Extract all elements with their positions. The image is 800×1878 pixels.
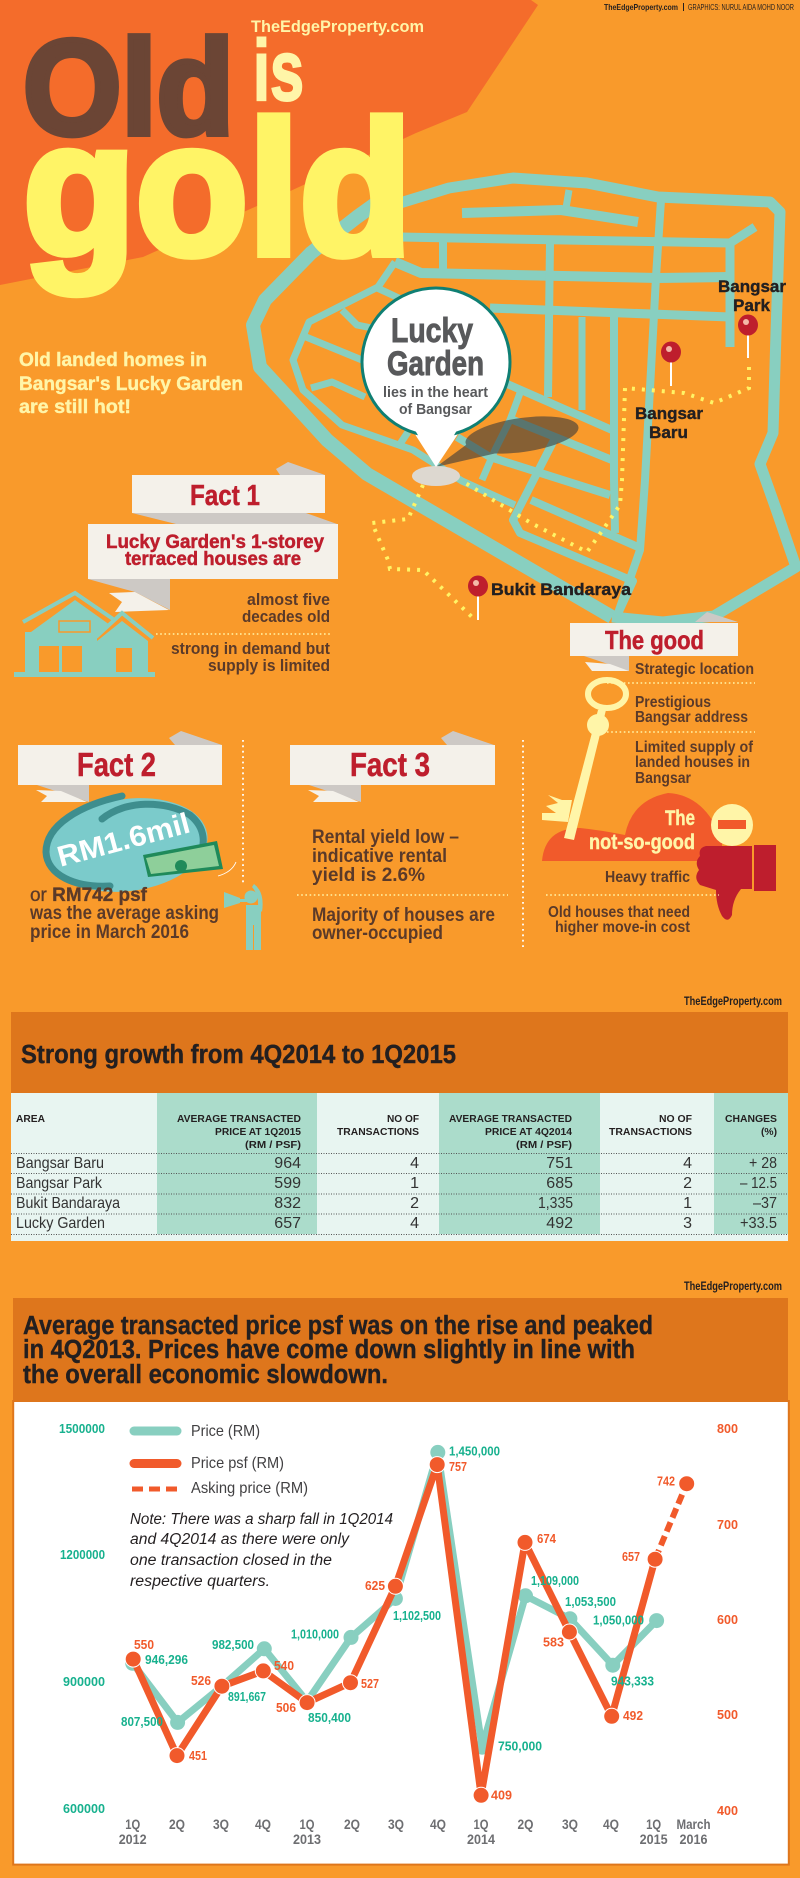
RM1.6mil price blob	[42, 788, 214, 902]
Fact 1 details: strong in demand but	[171, 640, 330, 658]
price psf line	[125, 1457, 695, 1803]
dotted route: Bukit Bandaraya to Lucky Garden	[372, 485, 472, 617]
title: is	[253, 23, 304, 119]
x axis labels: 1Q	[300, 1817, 314, 1832]
icon: houses	[14, 593, 155, 677]
Fact 2 text: was the average asking	[29, 902, 219, 924]
The not-so-good list: Old houses that need	[548, 904, 690, 921]
ribbon: Lucky Garden's 1-storey terraced houses: terraced houses are	[125, 548, 301, 570]
panel: chart heading: in 4Q2013. Prices have come down slightly in line with	[23, 1336, 635, 1364]
dotted route: Bangsar Park to Lucky Garden	[462, 367, 749, 552]
table header row: AVERAGE TRANSACTED	[177, 1113, 301, 1125]
price data labels: 750,000	[498, 1740, 542, 1754]
x axis labels: 4Q	[255, 1817, 271, 1832]
intro text: Old landed homes in	[19, 350, 207, 371]
chart legend: Asking price (RM)	[191, 1480, 308, 1497]
note: Note: There was a sharp fall in 1Q2014	[130, 1511, 393, 1528]
table row: Bangsar Baru: Bangsar Baru	[16, 1155, 104, 1172]
price psf data labels: 506	[276, 1701, 296, 1715]
note: one transaction closed in the	[130, 1552, 332, 1569]
pin: Bangsar Park	[738, 314, 758, 358]
x axis labels	[119, 1817, 710, 1847]
intro text: Bangsar's Lucky Garden	[19, 374, 243, 395]
table row: Bangsar Baru	[16, 1155, 777, 1172]
x axis labels: 2Q	[518, 1817, 534, 1832]
x axis labels: 2Q	[344, 1817, 360, 1832]
RM1.6mil price blob: RM1.6mil	[54, 808, 194, 874]
cloud: The not-so-good: not-so-good	[589, 831, 695, 854]
Fact 1 details: decades old	[242, 608, 330, 626]
The not-so-good list: Heavy traffic	[605, 869, 690, 886]
price psf data labels: 492	[623, 1709, 643, 1723]
price data labels	[121, 1444, 654, 1754]
The good list: Bangsar address	[635, 709, 748, 726]
panel: line chart	[13, 1401, 789, 1865]
table row: Bukit Bandaraya: 1,335	[538, 1195, 573, 1212]
price data labels: 946,296	[145, 1653, 188, 1667]
x axis labels: 3Q	[213, 1817, 229, 1832]
price psf data labels: 757	[449, 1460, 467, 1474]
callout: Lucky Garden: Garden	[387, 345, 484, 383]
x axis labels: 2Q	[169, 1817, 185, 1832]
Fact 2 text: or RM742 psf	[30, 884, 147, 906]
callout: Lucky Garden: Lucky	[391, 312, 473, 350]
x axis labels: March	[676, 1817, 710, 1832]
ribbon: The good	[570, 612, 738, 671]
Fact 3 text: indicative rental	[312, 845, 447, 867]
right axis labels	[717, 1422, 738, 1818]
table row: Lucky Garden: 3	[683, 1215, 692, 1232]
table row: Bukit Bandaraya: 832	[274, 1195, 301, 1212]
table header row: AREA	[16, 1113, 45, 1125]
icon: man with megaphone	[218, 862, 263, 950]
panel: chart heading: Average transacted price psf was on the rise and peaked	[23, 1312, 653, 1340]
left axis labels: 600000	[63, 1802, 105, 1816]
price psf data labels: 409	[491, 1788, 512, 1802]
table row: Bangsar Baru: 964	[274, 1155, 301, 1172]
right axis labels: 800	[717, 1422, 738, 1436]
credit line	[604, 2, 794, 12]
price psf data labels: 583	[543, 1636, 564, 1650]
ribbon: The good: The good	[605, 625, 704, 655]
panel: chart heading: the overall economic slowdown.	[23, 1361, 388, 1389]
x axis labels: 3Q	[388, 1817, 404, 1832]
callout: Lucky Garden: lies in the heart	[383, 385, 488, 401]
The not-so-good list: higher move-in cost	[555, 919, 690, 936]
table header row: TRANSACTIONS	[609, 1126, 692, 1138]
icon: key	[542, 680, 626, 840]
map of Bangsar roads	[253, 178, 796, 622]
pin: Bangsar Baru	[661, 342, 681, 386]
The not-so-good list	[546, 869, 719, 936]
note: and 4Q2014 as there were only	[130, 1531, 350, 1548]
chart legend: Price (RM)	[191, 1423, 260, 1440]
table row: Bukit Bandaraya	[16, 1195, 777, 1212]
price data labels: 891,667	[228, 1690, 266, 1704]
table header row: (RM / PSF)	[245, 1139, 301, 1151]
right axis labels: 400	[717, 1804, 738, 1818]
table row: Lucky Garden: 657	[274, 1215, 301, 1232]
x axis labels: 2014	[467, 1832, 495, 1847]
Fact 3 text	[297, 826, 508, 944]
table header row: (RM / PSF)	[516, 1139, 572, 1151]
x axis labels: 4Q	[430, 1817, 446, 1832]
panel: growth table heading: Strong growth from 4Q2014 to 1Q2015	[21, 1041, 456, 1069]
Fact 1 details: supply is limited	[208, 657, 330, 675]
Fact 1 details	[156, 591, 332, 675]
price data labels: 1,109,000	[531, 1574, 579, 1588]
price line	[125, 1445, 664, 1755]
title: Old	[23, 12, 234, 163]
x axis labels: 1Q	[646, 1817, 661, 1832]
table row: Bangsar Baru: 4	[683, 1155, 692, 1172]
x axis labels: 4Q	[603, 1817, 619, 1832]
table row: Bangsar Baru: 751	[546, 1155, 573, 1172]
The good list: Limited supply of	[635, 739, 754, 756]
ribbon: Fact 1	[132, 462, 337, 524]
note	[130, 1511, 393, 1590]
Fact 2 text: price in March 2016	[30, 921, 189, 943]
x axis labels: 3Q	[562, 1817, 578, 1832]
table row: Bangsar Park	[16, 1175, 777, 1192]
map label: Bangsar Baru: Bangsar	[635, 404, 703, 423]
table row: Lucky Garden: 492	[546, 1215, 573, 1232]
left axis labels: 900000	[63, 1675, 105, 1689]
chart legend	[132, 1423, 308, 1497]
price data labels: 1,010,000	[291, 1628, 339, 1642]
table row: Bangsar Park: Bangsar Park	[16, 1175, 103, 1192]
left axis labels: 1500000	[59, 1422, 105, 1436]
right axis labels: 600	[717, 1613, 738, 1627]
map label: Bangsar Baru: Baru	[649, 423, 688, 442]
icon: banknote	[143, 841, 223, 877]
table row: Bangsar Park: – 12.5	[740, 1175, 777, 1192]
map label: Bukit Bandaraya: Bukit Bandaraya	[491, 580, 632, 599]
panel: chart heading	[13, 1298, 788, 1401]
table row: Lucky Garden: 4	[410, 1215, 419, 1232]
The good list	[607, 661, 755, 787]
table row: Bangsar Park: 685	[546, 1175, 573, 1192]
price psf data labels: 742	[657, 1475, 675, 1489]
x axis labels: 1Q	[125, 1817, 140, 1832]
price psf data labels: 674	[537, 1532, 556, 1546]
table header row: AVERAGE TRANSACTED	[449, 1113, 572, 1125]
table row: Bukit Bandaraya: 1	[683, 1195, 692, 1212]
intro text	[19, 350, 243, 418]
table header row: PRICE AT 4Q2014	[485, 1126, 572, 1138]
chart legend: Price psf (RM)	[191, 1455, 284, 1472]
cloud: The not-so-good: The	[665, 807, 695, 830]
The good list: Strategic location	[635, 661, 754, 678]
map label: Bangsar Park	[718, 277, 786, 315]
table header row: CHANGES	[725, 1113, 777, 1125]
ribbon: Fact 2: Fact 2	[77, 746, 156, 783]
panel: growth table heading	[11, 1012, 788, 1093]
price data labels: 850,400	[308, 1711, 351, 1725]
ribbon: Fact 3	[290, 731, 495, 802]
x axis labels: 1Q	[474, 1817, 488, 1832]
credit line: TheEdgeProperty.com	[604, 2, 678, 12]
table row: Bangsar Park: 1	[410, 1175, 419, 1192]
right axis labels: 500	[717, 1708, 738, 1722]
price psf data labels: 540	[274, 1659, 294, 1673]
Fact 3 text: Majority of houses are	[312, 904, 495, 926]
table row: Bukit Bandaraya: Bukit Bandaraya	[16, 1195, 120, 1212]
note: respective quarters.	[130, 1573, 270, 1590]
Fact 3 text: yield is 2.6%	[312, 864, 425, 886]
price psf data labels: 550	[134, 1638, 154, 1652]
The good list: landed houses in	[635, 754, 750, 771]
icon: minus sign	[711, 804, 753, 846]
price psf data labels	[134, 1460, 675, 1802]
table row: Lucky Garden	[16, 1215, 777, 1232]
x axis labels: 2016	[680, 1832, 708, 1847]
Fact 1 details: almost five	[247, 591, 330, 609]
icon: thumbs down	[696, 845, 776, 920]
site name: TheEdgeProperty.com	[251, 17, 424, 36]
dark orange title banner	[0, 0, 538, 285]
table row: Bangsar Baru: 4	[410, 1155, 419, 1172]
table row: Lucky Garden: +33.5	[740, 1215, 777, 1232]
price psf data labels: 625	[365, 1579, 385, 1593]
The good list: Bangsar	[635, 770, 691, 787]
cloud: The not-so-good	[542, 793, 722, 861]
map label: Bangsar Baru	[635, 404, 703, 442]
table row: Bukit Bandaraya: –37	[753, 1195, 777, 1212]
left axis labels	[59, 1422, 105, 1816]
table header row: TRANSACTIONS	[337, 1126, 419, 1138]
intro text: are still hot!	[19, 397, 131, 418]
table header row: NO OF	[387, 1113, 420, 1125]
price psf data labels: 657	[622, 1550, 640, 1564]
ribbon: Fact 3: Fact 3	[350, 746, 430, 783]
table header row: NO OF	[659, 1113, 693, 1125]
callout: Lucky Garden: of Bangsar	[399, 402, 472, 418]
location shadow	[436, 410, 581, 467]
price data labels: 1,050,000	[593, 1613, 644, 1627]
table row: Bukit Bandaraya: 2	[410, 1195, 419, 1212]
ribbon: Fact 2	[18, 731, 222, 802]
price data labels: 1,450,000	[449, 1444, 500, 1458]
table header row	[16, 1113, 777, 1151]
right axis labels: 700	[717, 1518, 738, 1532]
panel: growth table	[11, 1093, 788, 1241]
price data labels: 1,102,500	[393, 1609, 441, 1623]
table row: Bangsar Park: 2	[683, 1175, 692, 1192]
x axis labels: 2015	[640, 1832, 668, 1847]
price data labels: 982,500	[212, 1638, 254, 1652]
price data labels: 1,053,500	[565, 1595, 616, 1609]
price data labels: 943,333	[611, 1674, 654, 1688]
The good list: Prestigious	[635, 694, 711, 711]
table header row: PRICE AT 1Q2015	[215, 1126, 301, 1138]
pin: Bukit Bandaraya	[468, 576, 488, 620]
left axis labels: 1200000	[60, 1548, 105, 1562]
ribbon: Lucky Garden's 1-storey terraced houses: Lucky Garden's 1-storey	[106, 531, 324, 553]
table row: Lucky Garden: Lucky Garden	[16, 1215, 105, 1232]
table row: Bangsar Baru: + 28	[749, 1155, 777, 1172]
table row: Bangsar Park: 599	[274, 1175, 301, 1192]
callout: Lucky Garden	[362, 288, 510, 467]
x axis labels: 2012	[119, 1832, 147, 1847]
map label: Bangsar Park: Park	[733, 296, 771, 315]
price psf data labels: 451	[189, 1749, 207, 1763]
price data labels: 807,500	[121, 1715, 163, 1729]
price psf data labels: 527	[361, 1677, 379, 1691]
ribbon: Lucky Garden's 1-storey terraced houses	[88, 524, 338, 612]
Fact 3 text: Rental yield low –	[312, 826, 459, 848]
x axis labels: 2013	[293, 1832, 321, 1847]
title: gold	[23, 83, 412, 295]
map label: Bangsar Park: Bangsar	[718, 277, 786, 296]
Fact 2 text	[29, 884, 219, 943]
Fact 3 text: owner-occupied	[312, 922, 443, 944]
location base disc	[412, 466, 460, 486]
table header row: (%)	[761, 1126, 777, 1138]
ribbon: Fact 1: Fact 1	[190, 480, 260, 512]
price psf data labels: 526	[191, 1674, 211, 1688]
